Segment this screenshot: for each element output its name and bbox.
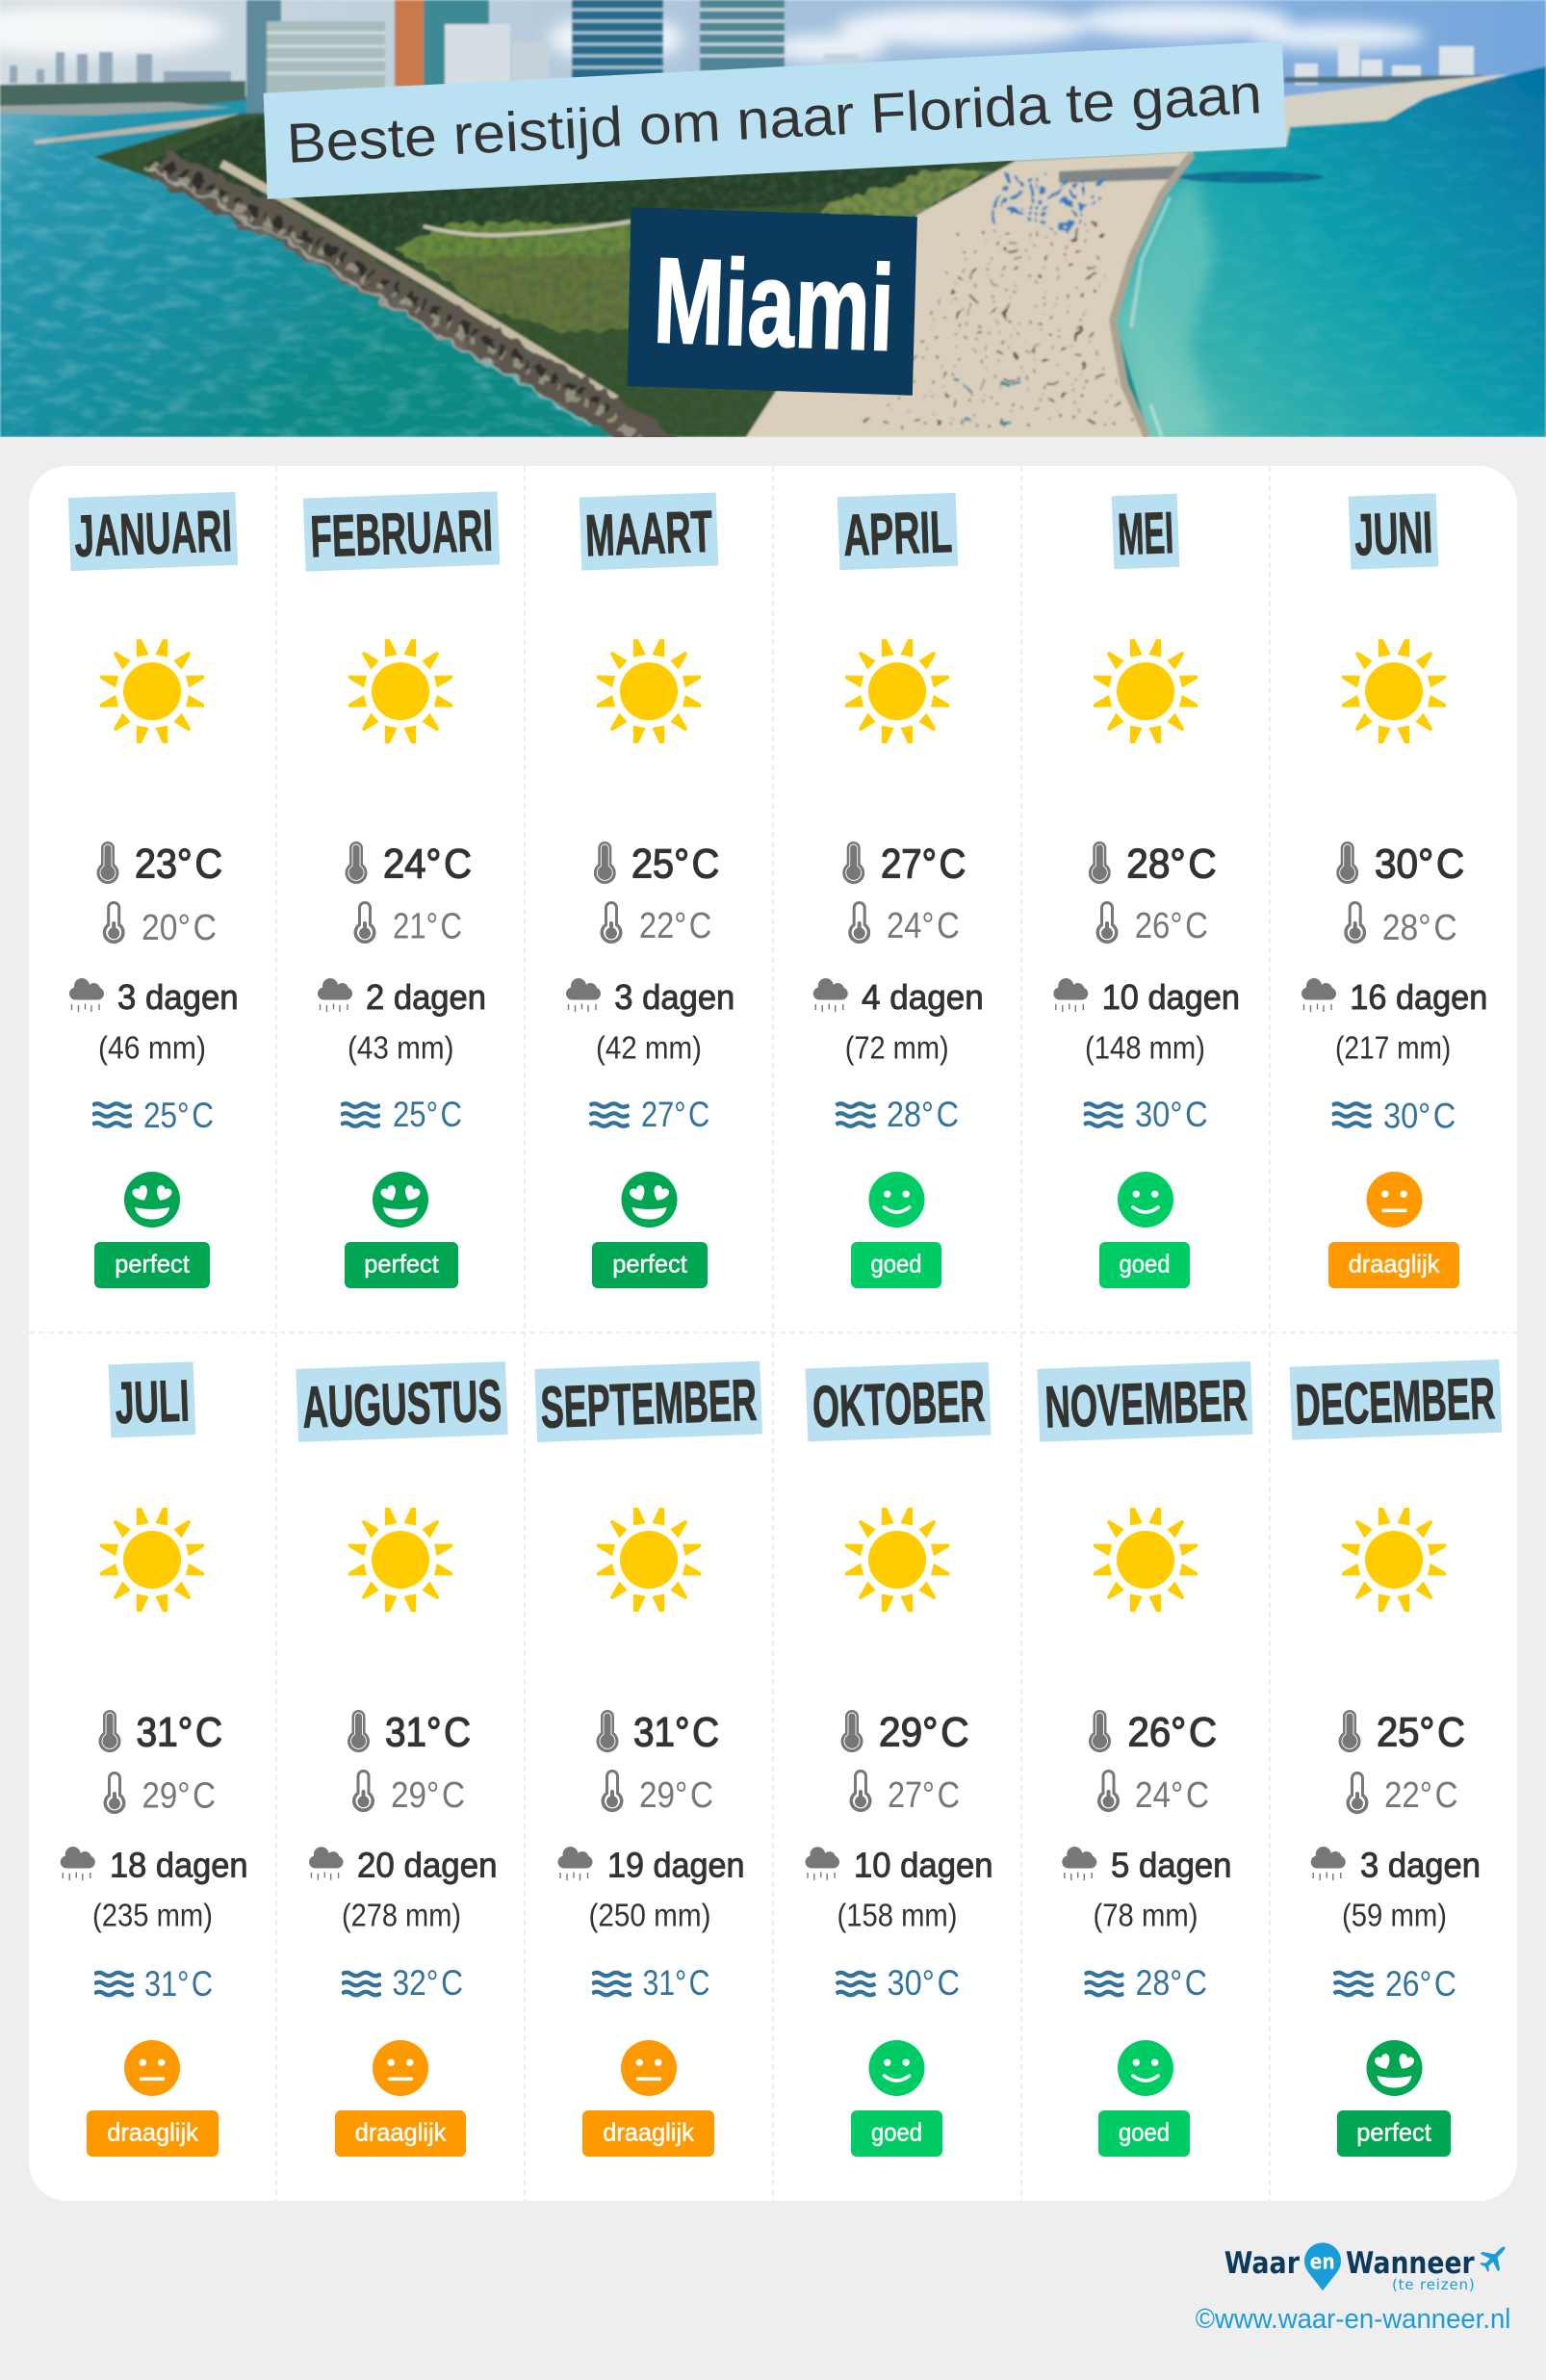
icon: sun [100,639,204,743]
min temperature: 24°C [1135,1775,1209,1816]
icon: sun [1094,1508,1198,1612]
month: september [534,1361,762,2157]
sea temperature: 30°C [888,1963,960,2003]
rocks and path along the shore [221,164,616,400]
sea temperature: 27°C [641,1095,709,1134]
rating badge [1098,2110,1190,2157]
icon: rating face [622,1172,678,1228]
icon: rain [1311,1847,1346,1880]
city title: Miami: Miami [652,232,896,376]
min temperature: 29°C [639,1775,713,1816]
rating badge: perfect [364,1250,439,1279]
month: augustus [296,1361,508,2157]
icon: max temperature [98,1710,121,1752]
sea temperature: 32°C [393,1963,463,2003]
sea temperature: 25°C [143,1096,214,1135]
month label [580,492,718,571]
max temperature: 23°C [135,841,222,888]
logo: Waar en Wanneer [1224,2238,1513,2293]
icon: min temperature [352,1770,374,1812]
icon: map pin [1304,2242,1341,2290]
sea temperature: 31°C [643,1963,710,2003]
icon: rain [69,978,104,1012]
rainfall: (46 mm) [98,1030,206,1065]
icon: sun [1342,639,1446,743]
rainfall: (217 mm) [1335,1030,1451,1065]
rainfall: (235 mm) [92,1898,213,1933]
icon: min temperature [1344,901,1366,944]
title banner: Beste reistijd om naar Florida te gaan [285,63,1263,175]
rating badge: perfect [115,1250,190,1279]
icon: rain [1062,1847,1096,1880]
min temperature: 22°C [639,906,711,946]
rainfall: (43 mm) [348,1030,454,1065]
icon: max temperature [96,841,119,884]
sea temperature: 31°C [144,1964,213,2004]
icon: waves [341,1103,380,1126]
icon: rating face [373,2040,428,2096]
buildings [246,0,281,116]
rating badge: draaglijk [355,2118,447,2147]
icon: max temperature [1338,1710,1361,1752]
icon: min temperature [354,901,375,944]
logo word: en: en [1310,2251,1335,2275]
icon: min temperature [601,901,622,944]
icon: rating face [621,2040,677,2096]
month label: OKTOBER [812,1368,986,1439]
rating badge: draaglijk [107,2118,199,2147]
month label [303,491,500,572]
month label: MAART [584,499,713,568]
rating badge: goed [870,1250,922,1279]
rating badge: perfect [1356,2118,1431,2147]
month label: NOVEMBER [1044,1367,1249,1440]
icon: max temperature [348,1710,370,1752]
title banner [264,41,1286,199]
peninsula [93,96,1059,437]
max temperature: 25°C [1377,1709,1465,1755]
icon: waves [836,1103,875,1126]
rain days: 20 dagen [357,1845,497,1884]
rating badge [592,1242,708,1288]
month label: MEI [1117,500,1174,567]
icon: min temperature [1346,1772,1369,1814]
max temperature: 31°C [137,1709,222,1755]
icon: waves [1084,1103,1123,1126]
distant skyline [10,52,231,83]
month label [296,1361,508,1442]
city title: Miami [628,207,917,396]
month label [806,1362,992,1441]
icon: min temperature [601,1770,624,1812]
month label: APRIL [842,499,953,568]
month: maart [566,492,734,1288]
month label [837,493,958,570]
max temperature: 31°C [385,1709,471,1755]
min temperature: 26°C [1135,906,1208,946]
far land left [0,79,246,108]
sea temperature: 28°C [887,1095,959,1134]
icon: waves [1334,1973,1373,1995]
min temperature: 24°C [887,906,960,946]
month label: FEBRUARI [309,498,494,569]
icon: rain [805,1847,839,1880]
icon: waves [1332,1103,1372,1126]
icon: min temperature [103,901,125,944]
rating badge: goed [871,2118,922,2147]
icon: sun [1094,639,1198,743]
icon: rain [558,1847,593,1880]
icon: rain [61,1847,95,1880]
rainfall: (59 mm) [1342,1898,1447,1933]
icon: waves [589,1103,630,1126]
sea temperature: 25°C [393,1095,462,1134]
rain days: 10 dagen [1102,977,1240,1017]
rating badge: goed [1119,2118,1170,2147]
icon: rating face [373,1172,428,1228]
rain days: 3 dagen [117,977,239,1017]
max temperature: 26°C [1128,1709,1217,1755]
min temperature: 28°C [1382,908,1457,948]
rating badge [1337,2110,1451,2157]
month: november [1037,1361,1253,2157]
min temperature: 22°C [1384,1775,1457,1816]
icon: waves [92,1103,132,1126]
rating badge [1328,1242,1459,1288]
website credit: ©www.waar-en-wanneer.nl [1196,2304,1510,2335]
rain days: 19 dagen [607,1845,745,1884]
icon: rain [309,1847,343,1880]
rain days: 4 dagen [862,977,984,1017]
rain days: 16 dagen [1350,977,1487,1017]
rating badge: draaglijk [603,2118,695,2147]
rainfall: (250 mm) [589,1898,710,1933]
rain days: 10 dagen [854,1845,993,1884]
icon: max temperature [842,841,864,884]
icon: min temperature [104,1772,125,1814]
water texture [0,119,593,437]
min temperature: 29°C [142,1775,216,1816]
icon: max temperature [1089,1710,1111,1752]
icon: rating face [1367,1172,1423,1228]
month label: AUGUSTUS [301,1367,502,1440]
hero photo: Miami Beach aerial [0,0,1546,457]
panel: monthly climate card [29,466,1517,2201]
min temperature: 21°C [393,907,462,947]
icon: min temperature [849,1770,872,1812]
rating badge [345,1242,458,1288]
icon: sun [597,1508,701,1612]
rain days: 18 dagen [110,1845,248,1884]
rating badge [851,1242,941,1288]
icon: sun [348,639,452,743]
rainfall: (78 mm) [1094,1898,1198,1933]
rating badge [94,1242,210,1288]
icon: airplane [1475,2238,1513,2277]
rating badge [582,2110,714,2157]
month: februari [303,491,500,1288]
icon: max temperature [594,841,616,884]
month: juli [61,1361,248,2157]
icon: rating face [1367,2040,1423,2096]
rating badge: perfect [612,1250,687,1279]
month: mei [1053,494,1240,1288]
rainfall: (278 mm) [342,1898,461,1933]
rain days: 3 dagen [1360,1845,1481,1884]
month label: SEPTEMBER [539,1367,758,1440]
sea temperature: 30°C [1383,1096,1456,1136]
icon: waves [94,1973,134,1995]
month label [1037,1361,1253,1442]
rating badge [335,2110,466,2157]
month: april [813,493,984,1288]
rainfall: (148 mm) [1085,1030,1205,1065]
icon: rating face [1118,1172,1173,1228]
rating badge: goed [1119,1250,1171,1279]
icon: max temperature [597,1710,618,1752]
icon: rain [566,978,601,1012]
icon: max temperature [345,841,368,884]
rain days: 5 dagen [1111,1845,1232,1884]
icon: rating face [868,1172,924,1228]
icon: min temperature [1095,901,1119,944]
sea temperature: 26°C [1385,1964,1456,2004]
month label [534,1361,762,1442]
month label: JANUARI [73,498,233,569]
month label [1112,494,1179,569]
icon: rain [318,978,352,1012]
icon: rain [1301,978,1336,1012]
month: januari [68,492,239,1288]
umbrellas and beachgoers [871,183,1136,424]
max temperature: 30°C [1375,841,1464,888]
min temperature: 27°C [888,1775,960,1816]
min temperature: 29°C [391,1775,465,1816]
logo word: Waar: Waar [1224,2246,1301,2281]
max temperature: 27°C [881,841,966,888]
month: oktober [805,1362,993,2157]
month: juni [1301,493,1487,1288]
icon: sun [845,1508,949,1612]
icon: rating face [868,2040,924,2096]
max temperature: 25°C [631,841,719,888]
icon: sun [100,1508,204,1612]
rating badge: draaglijk [1349,1250,1440,1279]
sea temperature: 28°C [1136,1963,1207,2003]
max temperature: 31°C [633,1709,719,1755]
icon: min temperature [848,901,870,944]
max temperature: 28°C [1126,841,1217,888]
month label: JUNI [1353,500,1433,567]
beach [746,151,1194,437]
icon: max temperature [841,1710,863,1752]
month label [68,492,238,571]
logo word: Wanneer: Wanneer [1346,2246,1475,2281]
rain days: 2 dagen [366,977,486,1017]
icon: sun [1342,1508,1446,1612]
rain days: 3 dagen [614,977,734,1017]
logo tagline: (te reizen) [1392,2276,1475,2293]
rainfall: (72 mm) [845,1030,949,1065]
icon: max temperature [1336,841,1358,884]
icon: rain [813,978,848,1012]
icon: sun [348,1508,452,1612]
month label [1349,493,1438,570]
min temperature: 20°C [142,908,217,948]
rating badge [87,2110,219,2157]
icon: waves [592,1973,631,1995]
max temperature: 24°C [383,841,472,888]
max temperature: 29°C [879,1709,968,1755]
icon: waves [1084,1973,1124,1995]
month label [109,1361,195,1437]
rating badge [1099,1242,1190,1288]
icon: rain [1053,978,1088,1012]
rating badge [851,2110,942,2157]
icon: sun [597,639,701,743]
month: december [1289,1359,1502,2157]
icon: sun [845,639,949,743]
icon: waves [342,1973,381,1995]
icon: min temperature [1097,1770,1120,1812]
month label: JULI [114,1367,191,1436]
rainfall: (158 mm) [837,1898,957,1933]
icon: rating face [124,1172,180,1228]
icon: max temperature [1089,841,1111,884]
icon: rating face [1118,2040,1173,2096]
icon: rating face [124,2040,180,2096]
rainfall: (42 mm) [596,1030,702,1065]
icon: waves [836,1973,876,1995]
sea temperature: 30°C [1135,1095,1208,1134]
